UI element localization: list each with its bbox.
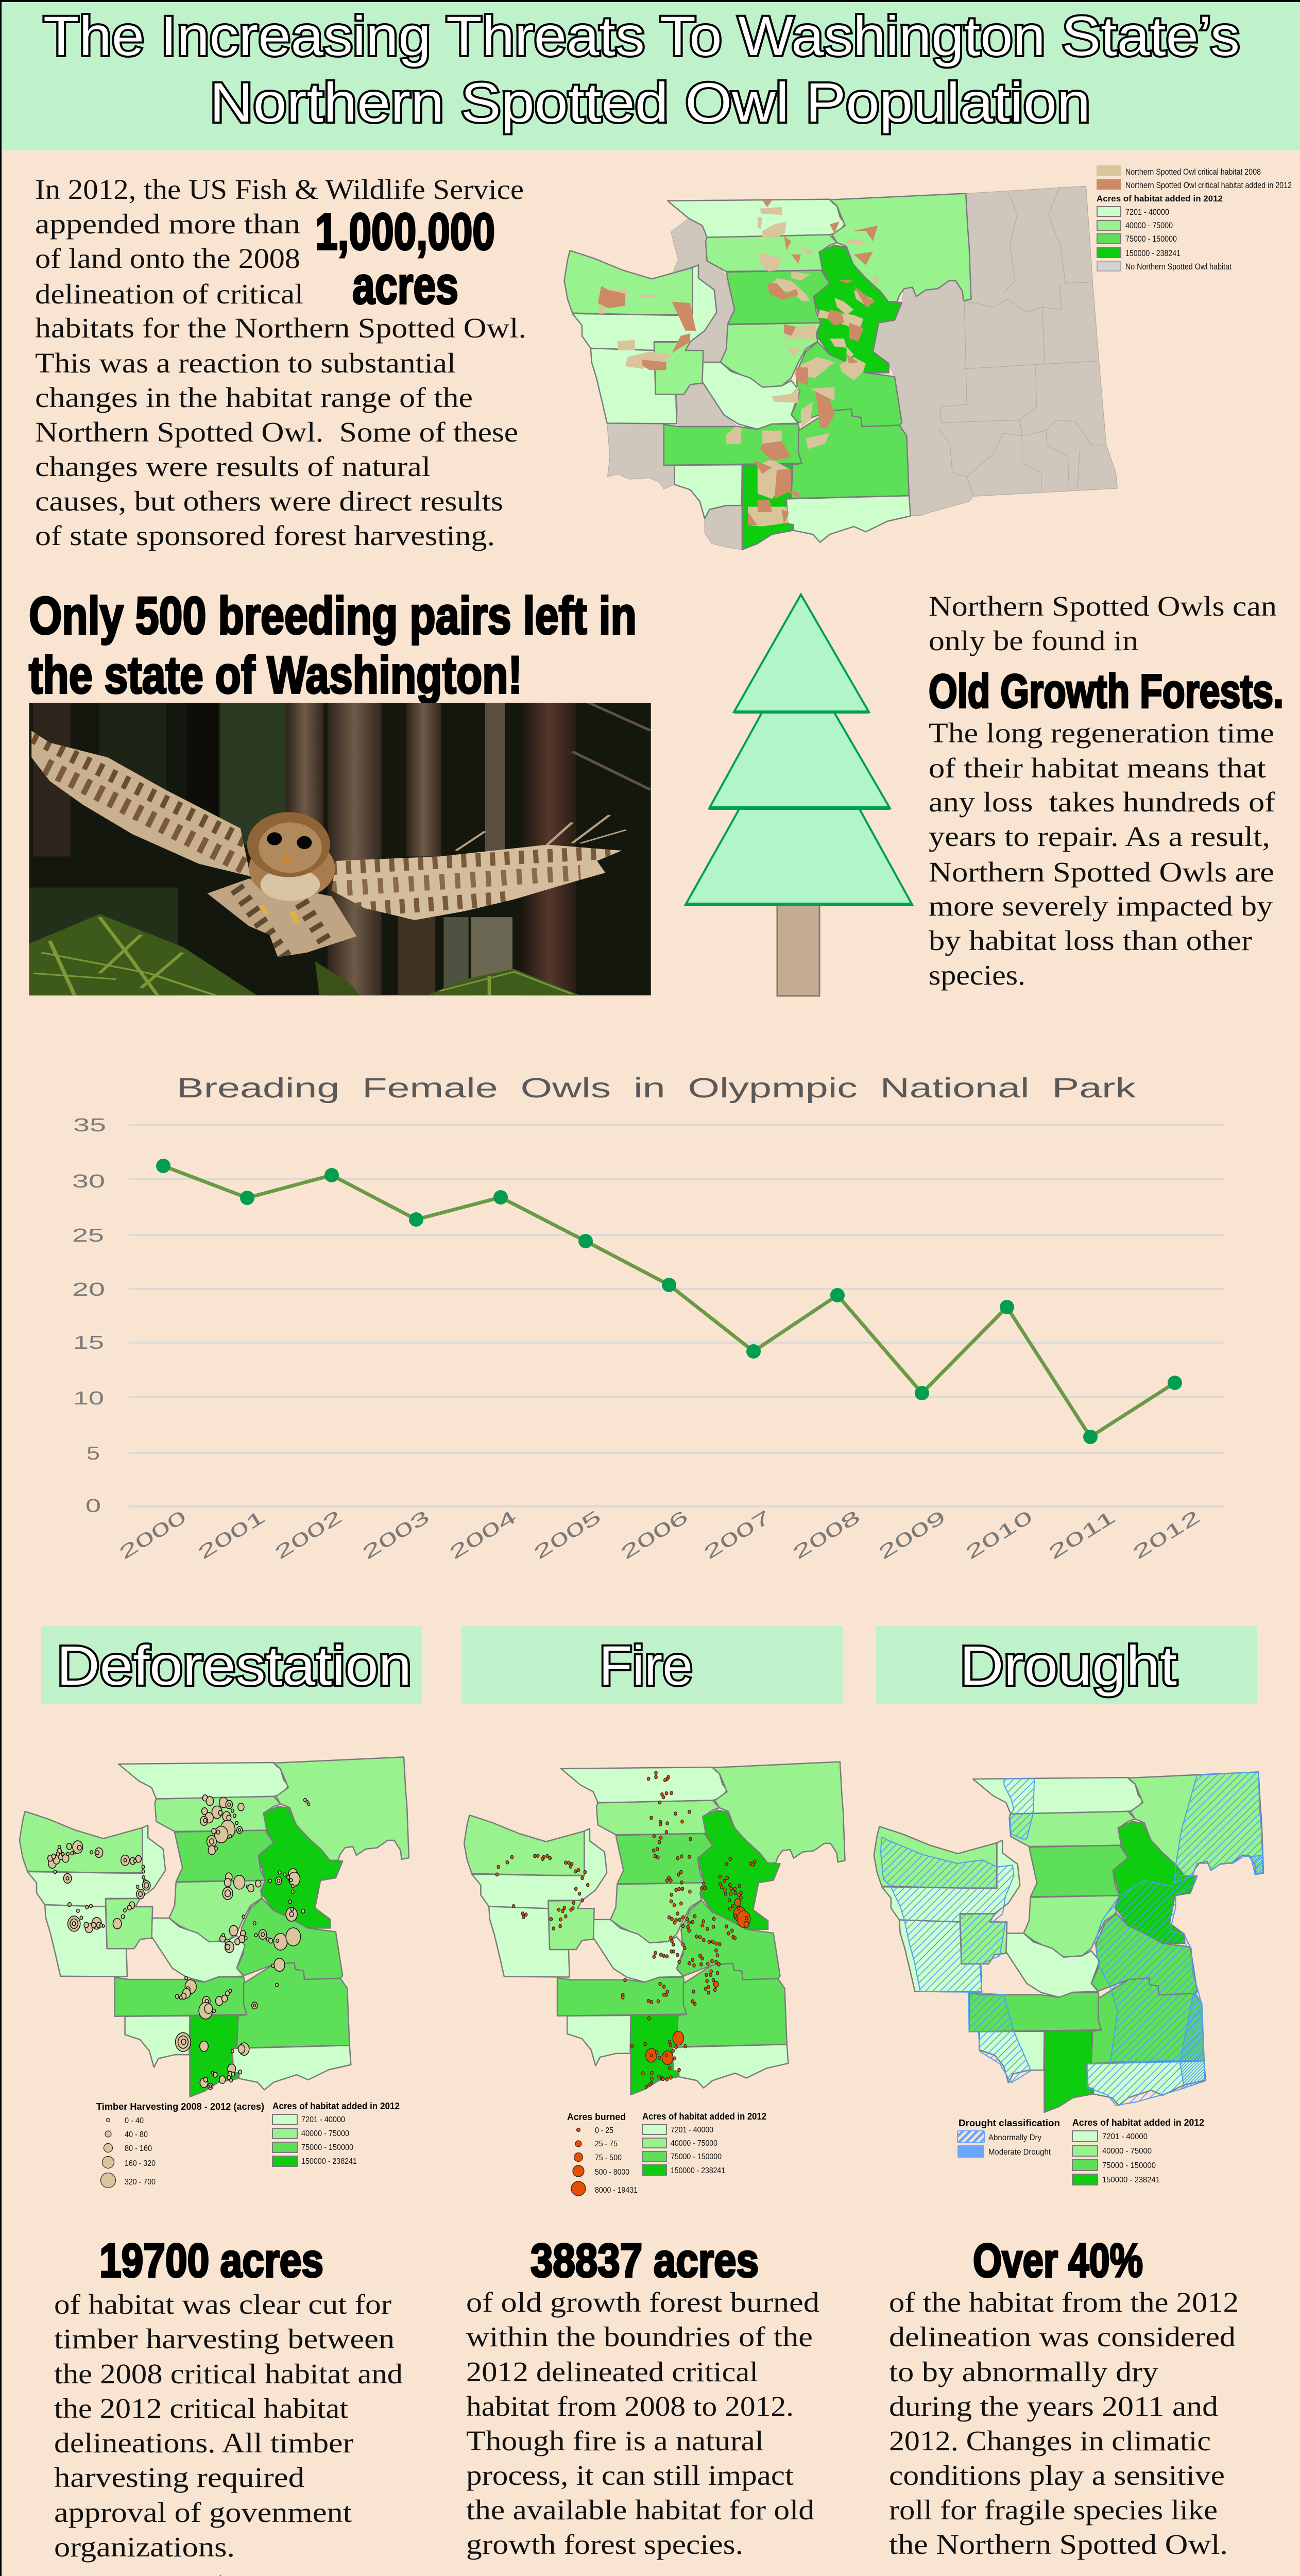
- heading: only 500 breeding pairs: Only 500 breeding pairs left in: [29, 586, 637, 645]
- panel text: fire: Though fire is a natural: [466, 2425, 764, 2456]
- title banner: [0, 2, 1300, 150]
- illustration: layered evergreen tree: [686, 595, 912, 996]
- x axis labels: 2011: [1045, 1506, 1119, 1564]
- legend: timber harvesting: 80 - 160: [125, 2144, 152, 2153]
- map legend: No Northern Spotted Owl habitat: [1125, 262, 1231, 272]
- x axis labels: 2008: [789, 1506, 864, 1564]
- intro text block: of land onto the 2008: [35, 243, 300, 274]
- map legend: 75000 - 150000: [1125, 234, 1177, 244]
- legend: fire: 150000 - 238241: [671, 2166, 725, 2175]
- panel text: drought: to by abnormally dry: [889, 2356, 1159, 2387]
- panel text: fire: the available habitat for old: [466, 2494, 814, 2526]
- y axis labels: 30: [72, 1171, 105, 1192]
- y axis labels: [72, 1114, 106, 1516]
- map: timber harvesting: [20, 1757, 409, 2097]
- panel text: fire: within the boundries of the: [466, 2321, 813, 2352]
- panel text: drought: [889, 2234, 1239, 2560]
- text block: old growth forests: more severely impacted by: [929, 890, 1273, 922]
- intro text block: Northern Spotted Owl. Some of these: [35, 416, 518, 448]
- line chart: breeding female owls: [72, 1073, 1224, 1564]
- legend: timber harvesting: [96, 2101, 400, 2188]
- text block: old growth forests: [929, 590, 1284, 991]
- panel text: deforestation: [54, 2234, 403, 2563]
- text block: old growth forests: any loss takes hundreds of: [929, 786, 1276, 818]
- map legend: [1097, 165, 1292, 272]
- intro text block: changes in the habitat range of the: [35, 382, 473, 413]
- x axis labels: 2010: [962, 1506, 1036, 1564]
- panel text: deforestation: of habitat was clear cut for: [54, 2289, 391, 2320]
- text block: old growth forests: Northern Spotted Owls can: [929, 590, 1277, 622]
- x axis labels: 2001: [194, 1506, 269, 1564]
- stat: 19700 acres: 19700 acres: [99, 2234, 323, 2287]
- callout: 1,000,000 acres: 1,000,000: [315, 203, 495, 261]
- heading: fire: [461, 1626, 843, 1704]
- panel text: fire: of old growth forest burned: [466, 2286, 819, 2318]
- map: drought: [874, 1772, 1263, 2112]
- legend: timber harvesting: 160 - 320: [125, 2159, 156, 2168]
- panel text: drought: conditions play a sensitive: [889, 2460, 1225, 2491]
- legend: timber harvesting: 0 - 40: [125, 2116, 144, 2125]
- county base map: [874, 1772, 1263, 2112]
- county base map: [464, 1762, 845, 2095]
- 2012 added habitat patches: [598, 200, 878, 525]
- y axis labels: 20: [72, 1279, 105, 1300]
- panel text: deforestation: harvesting required: [54, 2462, 304, 2493]
- panel text: drought: of the habitat from the 2012: [889, 2286, 1239, 2318]
- legend: fire: 7201 - 40000: [671, 2126, 713, 2134]
- data line: [163, 1166, 1175, 1437]
- intro text block: causes, but others were direct results: [35, 485, 503, 517]
- panel text: deforestation: timber harvesting between: [54, 2323, 395, 2354]
- intro text block: In 2012, the US Fish & Wildlife Service: [35, 174, 524, 205]
- fire dots: [495, 1771, 756, 2089]
- legend: fire: 0 - 25: [595, 2126, 613, 2135]
- text block: old growth forests: species.: [929, 959, 1025, 991]
- map legend: 40000 - 75000: [1125, 221, 1173, 230]
- y axis labels: 25: [72, 1225, 104, 1246]
- gridlines: [129, 1125, 1224, 1506]
- intro text block: [35, 174, 526, 551]
- y axis labels: 10: [73, 1387, 104, 1409]
- intro text block: appended more than: [35, 208, 300, 240]
- legend: drought: 75000 - 150000: [1102, 2161, 1156, 2170]
- x axis labels: 2003: [358, 1506, 433, 1564]
- panel text: deforestation: the 2012 critical habitat: [54, 2393, 348, 2424]
- heading: deforestation: [41, 1626, 422, 1704]
- x axis labels: [115, 1506, 1204, 1564]
- county base map: [20, 1757, 409, 2097]
- text block: old growth forests: by habitat loss than other: [929, 925, 1252, 956]
- county choropleth: [564, 194, 971, 550]
- heading: fire: Fire: [599, 1634, 693, 1697]
- y axis labels: 35: [73, 1114, 106, 1136]
- callout: 1,000,000 acres: [315, 203, 495, 315]
- x axis labels: 2012: [1129, 1506, 1204, 1564]
- legend: drought: Acres of habitat added in 2012: [1072, 2117, 1204, 2128]
- legend: fire: 8000 - 19431: [595, 2186, 638, 2195]
- x axis labels: 2002: [271, 1506, 346, 1564]
- y axis labels: 5: [87, 1443, 100, 1464]
- legend: timber harvesting: Acres of habitat added in 2012: [272, 2101, 400, 2111]
- map: critical habitat added in 2012: [564, 186, 1117, 550]
- legend: fire: 500 - 8000: [595, 2168, 629, 2177]
- legend: fire: 25 - 75: [595, 2140, 618, 2148]
- map legend: Acres of habitat added in 2012: [1097, 194, 1223, 204]
- heading: drought: [876, 1626, 1257, 1704]
- stat: 38837 acres: 38837 acres: [531, 2234, 759, 2287]
- x axis labels: 2007: [700, 1506, 775, 1564]
- map legend: 150000 - 238241: [1125, 248, 1181, 258]
- panel text: fire: 2012 delineated critical: [466, 2356, 758, 2387]
- legend: drought: Moderate Drought: [988, 2148, 1051, 2157]
- legend: drought: [957, 2117, 1204, 2185]
- text block: old growth forests: The long regeneration time: [929, 717, 1274, 749]
- legend: fire: 40000 - 75000: [671, 2139, 717, 2148]
- legend: timber harvesting: 7201 - 40000: [301, 2115, 345, 2124]
- intro text block: This was a reaction to substantial: [35, 347, 456, 379]
- panel text: fire: growth forest species.: [466, 2529, 743, 2560]
- x axis labels: 2005: [530, 1506, 605, 1564]
- panel text: fire: habitat from 2008 to 2012.: [466, 2391, 794, 2422]
- text block: old growth forests: of their habitat means that: [929, 752, 1266, 784]
- heading: only 500 breeding pairs: the state of Washington!: [29, 646, 522, 704]
- y axis labels: 0: [85, 1495, 101, 1516]
- title: Northern Spotted Owl Population: [210, 71, 1090, 133]
- legend: fire: Acres of habitat added in 2012: [642, 2111, 766, 2122]
- legend: drought: Drought classification: [959, 2118, 1060, 2128]
- title: The Increasing Threats To Washington State’s: [43, 5, 1240, 67]
- panel text: deforestation: organizations.: [54, 2531, 235, 2563]
- panel text: deforestation: delineations. All timber: [54, 2427, 353, 2459]
- panel text: drought: roll for fragile species like: [889, 2494, 1218, 2526]
- x axis labels: 2004: [446, 1506, 520, 1564]
- legend: fire: 75000 - 150000: [671, 2153, 722, 2161]
- panel text: fire: [466, 2234, 819, 2560]
- legend: timber harvesting: 75000 - 150000: [301, 2143, 353, 2152]
- y axis labels: 15: [73, 1332, 104, 1353]
- legend: timber harvesting: 320 - 700: [125, 2178, 156, 2187]
- text block: old growth forests: years to repair. As a result,: [929, 821, 1270, 852]
- intro text block: of state sponsored forest harvesting.: [35, 520, 495, 551]
- x axis labels: 2000: [115, 1506, 190, 1564]
- intro text block: habitats for the Northern Spotted Owl.: [35, 312, 526, 344]
- panel text: drought: during the years 2011 and: [889, 2391, 1218, 2422]
- text block: old growth forests: only be found in: [929, 625, 1138, 656]
- legend: drought: 150000 - 238241: [1102, 2176, 1160, 2184]
- chart title: Breading Female Owls in Olypmpic National Park: [177, 1073, 1136, 1104]
- legend: fire: 75 - 500: [595, 2154, 622, 2162]
- callout: 1,000,000 acres: acres: [352, 256, 458, 315]
- x axis labels: 2006: [617, 1506, 692, 1564]
- stat: over 40%: Over 40%: [973, 2234, 1143, 2287]
- legend: timber harvesting: Timber Harvesting 2008 - 2012 (acres): [96, 2102, 264, 2112]
- grey counties without habitat: [607, 186, 1117, 550]
- drought hatching: [881, 1772, 1263, 2106]
- panel text: drought: the Northern Spotted Owl.: [889, 2529, 1228, 2560]
- legend: drought: 7201 - 40000: [1102, 2132, 1148, 2141]
- map legend: Northern Spotted Owl critical habitat 2008: [1125, 167, 1261, 177]
- heading: only 500 breeding pairs: [29, 586, 637, 704]
- legend: timber harvesting: 150000 - 238241: [301, 2157, 357, 2166]
- legend: drought: 40000 - 75000: [1102, 2147, 1152, 2156]
- panel text: fire: process, it can still impact: [466, 2460, 794, 2491]
- intro text block: changes were results of natural: [35, 451, 431, 482]
- map: fire: [464, 1762, 845, 2095]
- legend: timber harvesting: 40 - 80: [125, 2130, 148, 2139]
- panel text: drought: 2012. Changes in climatic: [889, 2425, 1211, 2456]
- intro text block: delineation of critical: [35, 278, 303, 310]
- heading: deforestation: Deforestation: [57, 1634, 412, 1697]
- panel text: deforestation: the 2008 critical habitat and: [54, 2358, 403, 2389]
- text block: old growth forests: Northern Spotted Owls are: [929, 856, 1274, 888]
- timber harvest circles: [48, 1795, 310, 2090]
- map legend: 7201 - 40000: [1125, 207, 1169, 217]
- heading: drought: Drought: [960, 1634, 1177, 1697]
- legend: fire: [567, 2111, 766, 2196]
- legend: fire: Acres burned: [567, 2112, 626, 2122]
- photo: spotted owl in flight in old growth forest: [29, 703, 651, 995]
- panel text: deforestation: approval of govenment: [54, 2497, 352, 2528]
- 2008 critical habitat patches: [599, 207, 879, 527]
- data points: [156, 1159, 1182, 1444]
- title: [43, 5, 1240, 133]
- legend: timber harvesting: 40000 - 75000: [301, 2129, 349, 2138]
- x axis labels: 2009: [875, 1506, 949, 1564]
- legend: drought: Abnormally Dry: [988, 2133, 1041, 2142]
- panel text: drought: delineation was considered: [889, 2321, 1236, 2352]
